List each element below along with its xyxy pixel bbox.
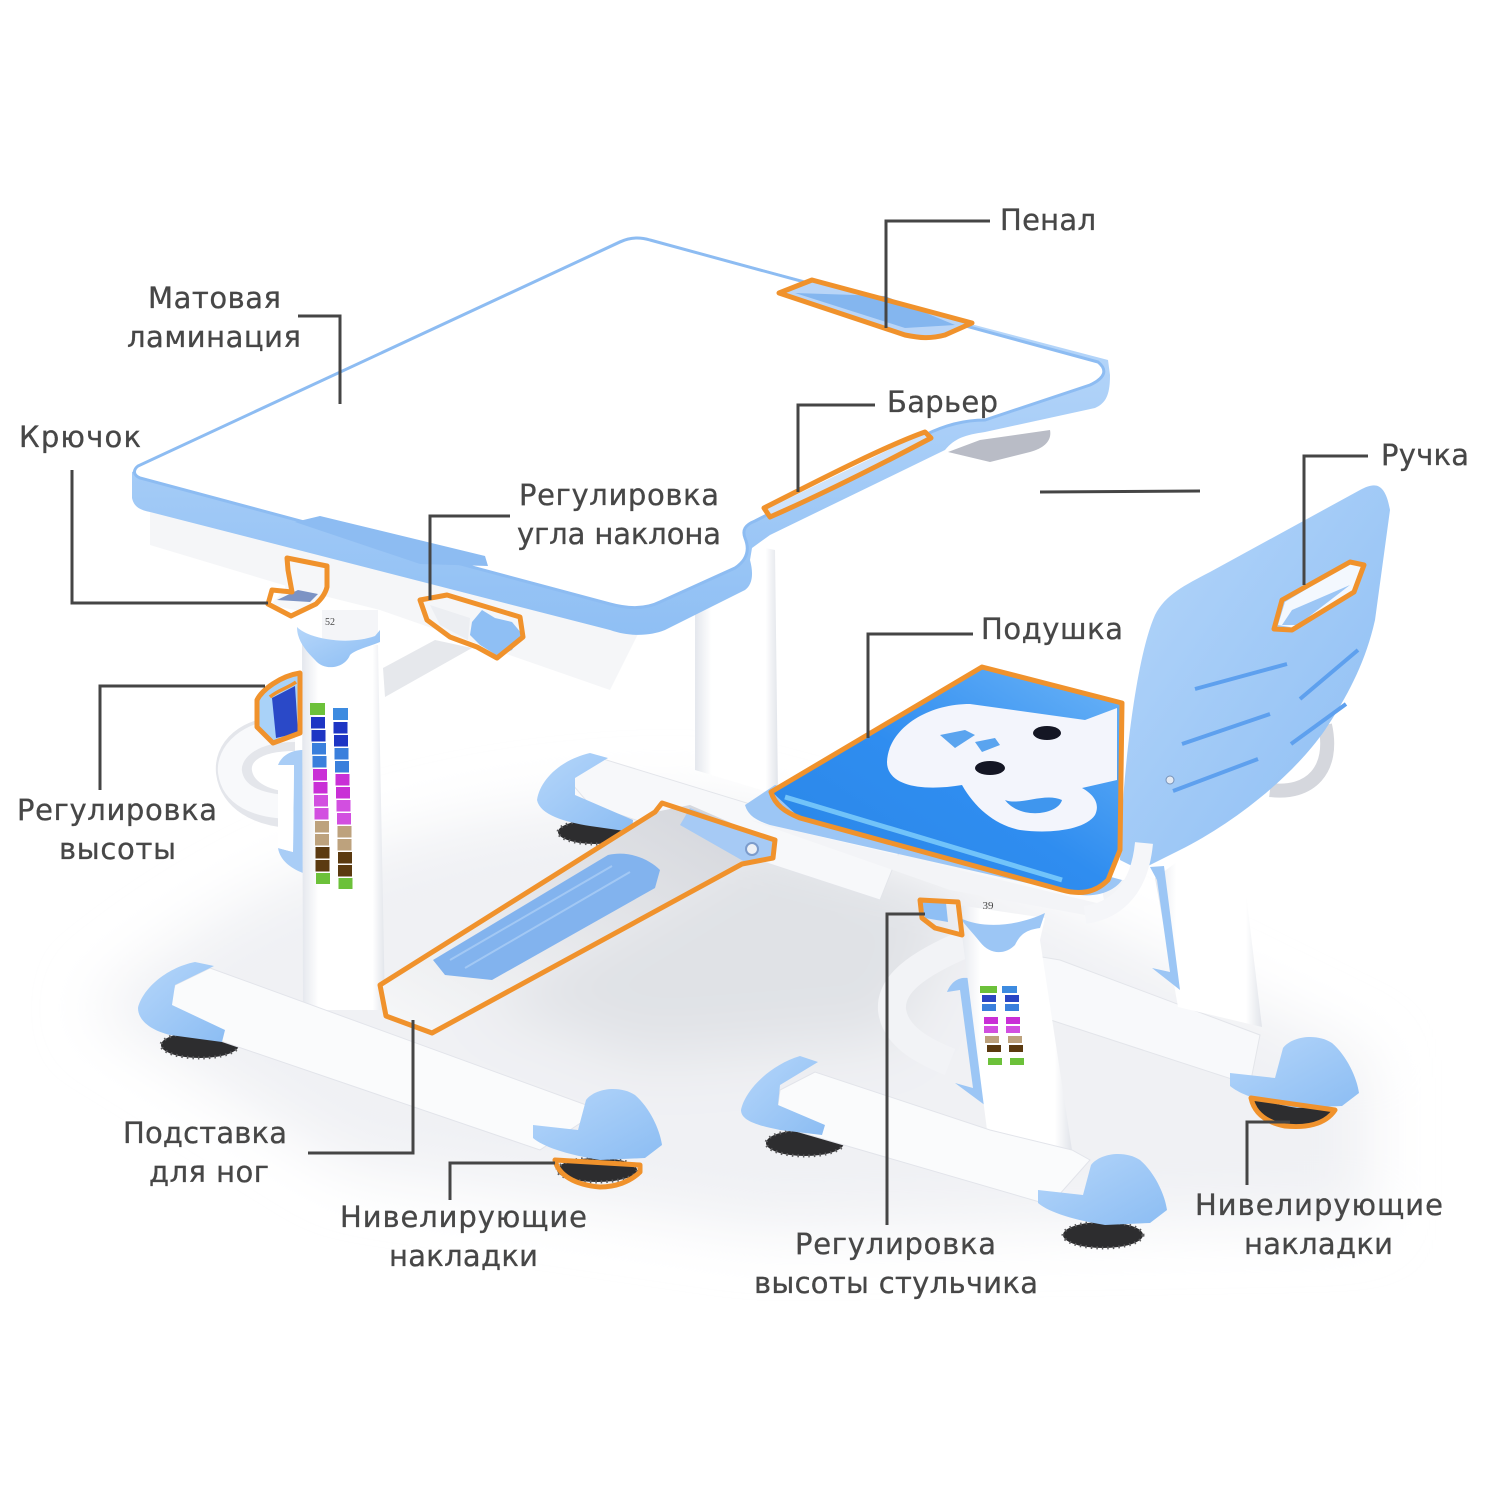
label: handle: Ручка [1381,438,1469,472]
seat cushion [771,667,1122,893]
chair back cap [1230,1037,1359,1108]
desk: tabletop surface [134,238,1104,608]
pencil tray [779,280,972,338]
desk: under-tube [383,640,472,697]
label: handle [1304,438,1469,585]
chair: support tube [1270,725,1327,791]
cushion reflection [785,797,1062,880]
footrest outline [380,803,775,1033]
label: footrest: для ног [149,1155,269,1189]
front foot left pad [161,1032,239,1058]
leveling pad outline [555,1160,640,1187]
label: pencil tray: Пенал [1000,203,1096,237]
label: pencil tray [886,203,1096,328]
backrest handle outline [1274,562,1364,630]
monkey nose [975,761,1005,775]
chair: seat base [745,785,1150,915]
column collar [297,627,380,667]
chair leveling pad [1252,1100,1333,1126]
label: matte lamination: Матовая [148,281,281,315]
label: tilt adjustment: угла наклона [517,517,721,551]
floor shadow [90,800,1370,1230]
label: tilt adjustment: Регулировка [519,478,719,512]
label: leveling pads left: накладки [389,1239,538,1273]
backrest bolts [1166,776,1174,784]
label: barrier [798,385,998,492]
monkey eyes [1033,726,1061,740]
seat height number: 39 [982,900,994,912]
label: leveling pads left [340,1163,587,1273]
monkey mouth [1005,797,1062,813]
chair: front foot bar [741,1056,1167,1248]
chair back strip [1150,866,1180,990]
desk: rear column [695,545,778,795]
label: hook: Крючок [19,420,141,454]
height number: 52 [325,617,335,628]
footrest [380,803,775,1033]
tabletop accessory tray [295,516,488,566]
height lever outline [257,673,300,743]
front foot left cap [138,962,225,1042]
label: tilt adjustment [430,478,721,600]
label: hook [19,420,268,603]
label: matte lamination: ламинация [127,320,301,354]
chair leveling outline [1251,1098,1335,1127]
label: footrest: Подставка [123,1116,287,1150]
label: height adjustment [17,686,265,866]
chair height handle [947,978,986,1106]
back foot cap [537,753,633,832]
label: leveling pads right: Нивелирующие [1195,1188,1443,1222]
backrest vents [1173,650,1358,791]
hook outline [268,558,327,616]
footrest bracket [680,808,775,862]
desk: side tube loop [230,730,303,873]
chair: side tube loop [892,943,986,1106]
chair front left cap [741,1056,825,1135]
desk: under-rim of right side [948,430,1050,462]
label: leveling pads left: Нивелирующие [340,1200,587,1234]
stray rule [1040,491,1200,492]
label: seat height adjustment: высоты стульчика [754,1266,1038,1300]
barrier outline [764,432,931,517]
label: cushion: Подушка [981,612,1123,646]
seat height lever outline [920,900,962,935]
desk: left column [297,610,385,1010]
backrest handle [1278,563,1362,628]
label: barrier: Барьер [887,385,998,419]
chair front left pad [766,1130,844,1156]
front foot right pad [557,1158,637,1182]
chair: front column [958,843,1144,1150]
chair collar [960,913,1045,952]
label: height adjustment: высоты [59,832,176,866]
chair back column [1155,818,1262,1027]
barrier [764,432,931,517]
chair: backrest [1120,485,1390,870]
label: leveling pads right: накладки [1244,1227,1393,1261]
footrest pivot [746,843,758,855]
cushion outline [771,667,1122,893]
chair: back foot bar [1000,818,1359,1127]
height chart [310,703,352,889]
desk: back foot bar [537,753,900,900]
chair height chart [980,986,1024,1065]
chair front right cap [1038,1154,1167,1225]
desk: tabletop blue rim [132,237,1110,635]
desk: drawer under tabletop [150,510,640,690]
label: leveling pads right [1195,1122,1443,1261]
chair front right pad [1063,1222,1143,1248]
label: footrest [123,1020,413,1189]
seat height lever [920,900,962,935]
label: cushion [868,612,1123,738]
tilt knob [420,595,523,658]
hook [268,558,327,616]
front foot right cap [533,1089,662,1160]
footrest pad [433,854,660,980]
desk: front foot bar [138,962,662,1187]
height handle [278,750,303,873]
monkey face [887,704,1117,831]
label: matte lamination [127,281,340,404]
label: height adjustment: Регулировка [17,793,217,827]
back foot pad [558,820,632,844]
pencil tray outline [779,280,972,338]
monkey blue patches [940,730,1000,752]
label: seat height adjustment [754,914,1038,1300]
label: seat height adjustment: Регулировка [795,1227,996,1261]
height lever [257,673,300,743]
tilt knob outline [420,595,523,658]
